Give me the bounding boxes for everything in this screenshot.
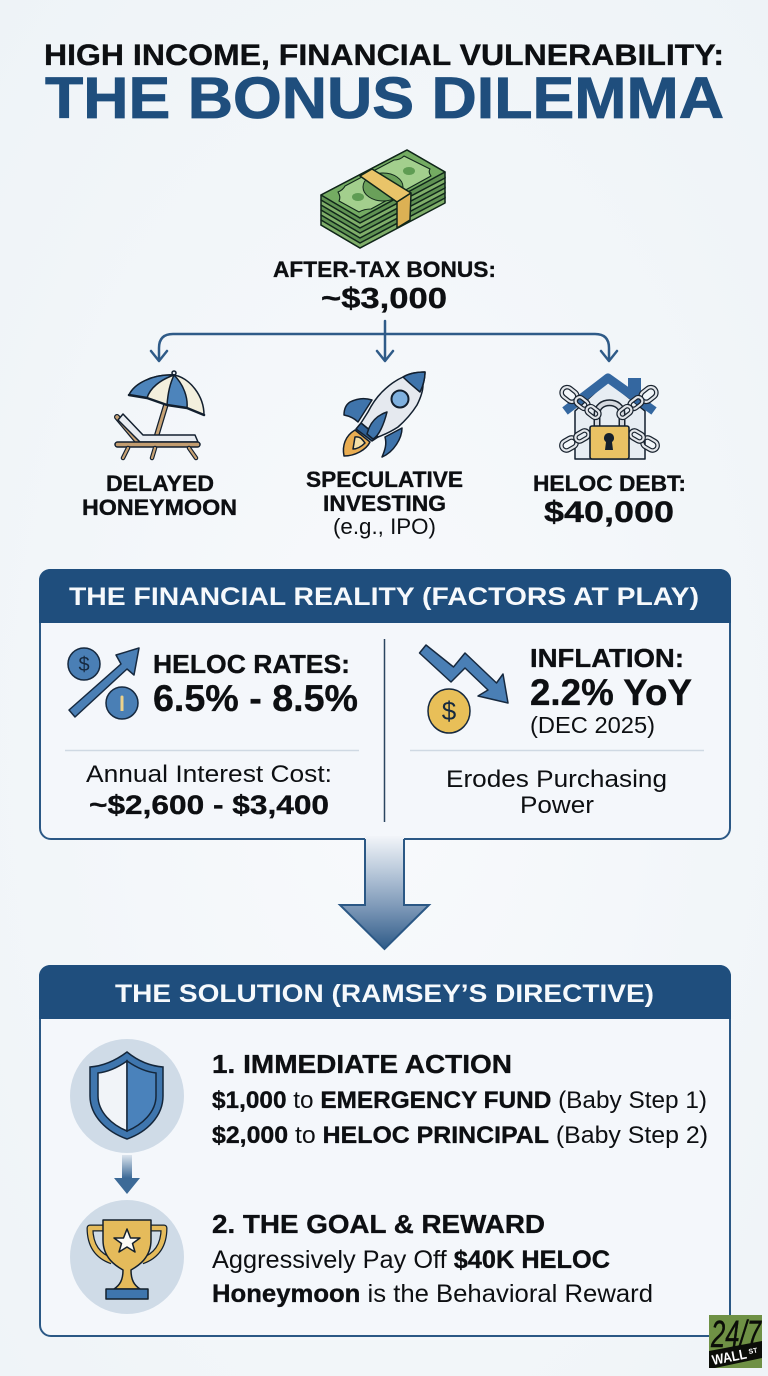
inflation figure [530,643,692,738]
bonus amount label: AFTER-TAX BONUS: [273,257,496,282]
erodes purchasing power [446,766,667,819]
panel header: financial reality [39,569,731,623]
icon: rising rate arrow with coins [68,648,139,719]
option label: HELOC debt: HELOC DEBT: [533,471,686,496]
panel header: the solution: THE SOLUTION (RAMSEY’S DIRECTIVE) [115,980,654,1008]
logo: 24/7 Wall St: WALL [711,1345,748,1368]
option label: delayed honeymoon: HONEYMOON [82,495,237,520]
erodes purchasing power: Power [520,792,594,819]
option label: speculative investing: INVESTING [323,491,446,516]
panel header: the solution [39,965,731,1019]
step 1: immediate action: 1. IMMEDIATE ACTION [212,1049,512,1079]
option label: speculative investing [306,467,463,539]
erodes purchasing power: Erodes Purchasing [446,766,667,793]
heloc rates figure: 6.5% - 8.5% [153,678,358,719]
chains [559,385,659,452]
logo: 24/7 Wall St: ST [748,1347,759,1356]
step 2: the goal and reward: Honeymoon is the Behavioral Reward [212,1280,653,1308]
bonus amount label: ~$3,000 [321,283,447,315]
icon: falling arrow with coin [420,645,508,733]
icon: rocket [343,372,425,457]
arrow: small down arrow [114,1155,140,1194]
icon: rising rate arrow with coins: $ [78,654,90,676]
icon: beach umbrella and lounger [115,371,204,458]
option label: speculative investing: SPECULATIVE [306,467,463,492]
arrow: branching connector [151,321,617,361]
step 1: immediate action [212,1049,708,1149]
logo: 24/7 Wall St [709,1314,762,1368]
option label: speculative investing: (e.g., IPO) [333,514,436,539]
inflation figure: INFLATION: [530,643,684,673]
arrow: large down arrow [340,836,429,949]
annual interest cost [86,761,332,820]
icon: falling arrow with coin: $ [442,696,457,726]
icon: trophy in circle [70,1200,184,1314]
annual interest cost: Annual Interest Cost: [86,761,332,788]
heloc rates figure [153,649,358,719]
step 1: immediate action: $1,000 to EMERGENCY FUND (Baby Step 1) [212,1087,707,1114]
option label: delayed honeymoon [82,471,237,520]
inflation figure: (DEC 2025) [530,712,655,738]
panel: the financial reality [39,569,731,839]
step 2: the goal and reward: Aggressively Pay Off $40K HELOC [212,1246,610,1274]
panel header: financial reality: THE FINANCIAL REALITY (FACTORS AT PLAY) [69,583,699,611]
icon: house chained with padlock [559,378,659,459]
step 1: immediate action: $2,000 to HELOC PRINCIPAL (Baby Step 2) [212,1122,708,1149]
icon: shield in circle [70,1039,184,1153]
step 2: the goal and reward [212,1209,653,1308]
heloc rates figure: HELOC RATES: [153,649,350,679]
annual interest cost: ~$2,600 - $3,400 [89,790,329,820]
title [44,39,724,131]
title: THE BONUS DILEMMA [45,66,724,131]
option label: HELOC debt: $40,000 [544,496,674,529]
panel: the solution [39,965,731,1336]
option label: delayed honeymoon: DELAYED [106,471,214,496]
step 2: the goal and reward: 2. THE GOAL & REWARD [212,1209,545,1239]
title: HIGH INCOME, FINANCIAL VULNERABILITY: [44,39,724,72]
bonus amount label [273,257,496,315]
inflation figure: 2.2% YoY [530,672,692,713]
option label: HELOC debt [533,471,686,529]
icon: stack of cash [321,150,445,248]
